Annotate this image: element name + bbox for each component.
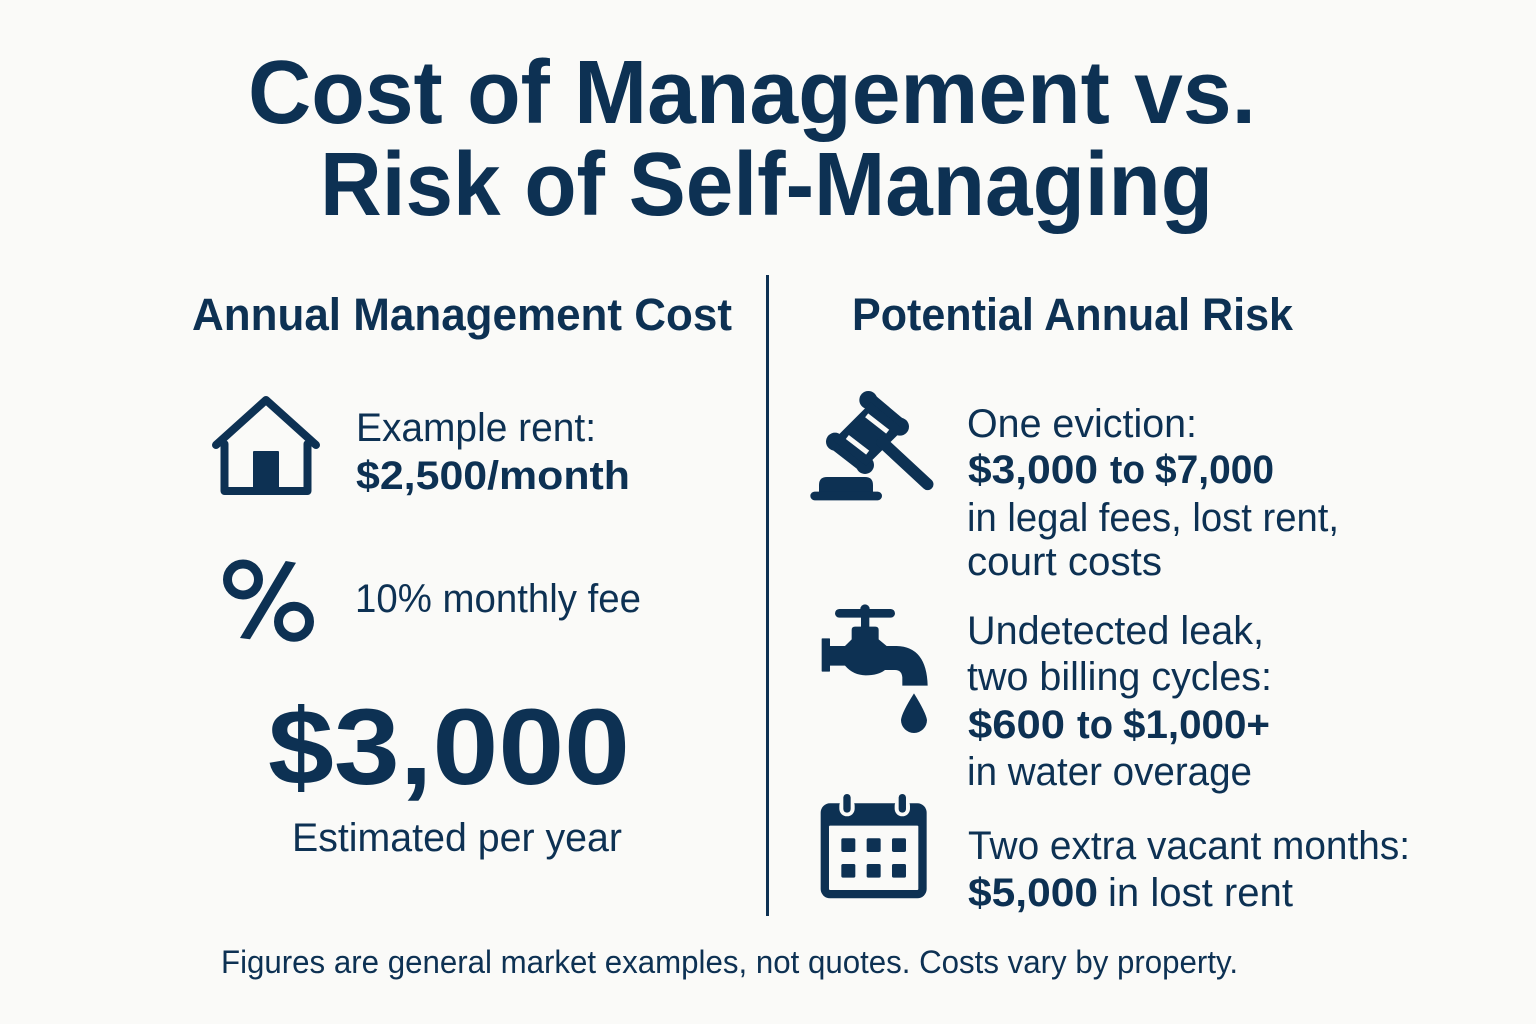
text: leak risk: Undetected leak, — [967, 609, 1264, 653]
text: vacancy risk: in lost rent — [1108, 871, 1293, 915]
text: eviction risk: One eviction: — [967, 402, 1197, 446]
text: example rent: $2,500/month — [356, 454, 630, 498]
text: eviction risk — [967, 402, 1339, 584]
title: Cost of Management vs. — [248, 43, 1256, 143]
text: vacancy risk — [968, 824, 1410, 915]
icon: calendar — [821, 794, 927, 898]
text: leak risk: to — [1077, 703, 1113, 747]
text: leak risk: $1,000+ — [1123, 703, 1270, 747]
footnote: Figures are general market examples, not quotes. Costs vary by property. — [221, 944, 1238, 980]
icon: dripping faucet — [822, 604, 928, 733]
big number: annual cost: $3,000 — [268, 686, 630, 807]
text: vacancy risk: Two extra vacant months: — [968, 824, 1410, 868]
text: eviction risk: $7,000 — [1155, 448, 1274, 492]
heading: potential annual risk: Potential Annual Risk — [852, 289, 1294, 340]
text: eviction risk: court costs — [967, 540, 1162, 584]
text: leak risk: $600 — [968, 703, 1065, 747]
text: eviction risk: to — [1110, 448, 1145, 492]
icon: percent — [228, 561, 310, 639]
text: eviction risk: $3,000 — [968, 448, 1098, 492]
text: vacancy risk: $5,000 — [968, 871, 1098, 915]
caption: estimated per year: Estimated per year — [292, 816, 622, 860]
text: eviction risk: in legal fees, lost rent, — [967, 496, 1339, 540]
icon: house — [216, 400, 316, 491]
text: example rent: Example rent: — [356, 406, 596, 450]
icon: gavel — [815, 391, 928, 496]
text: monthly fee: 10% monthly fee — [355, 577, 641, 621]
title — [248, 43, 1256, 235]
text: leak risk: two billing cycles: — [967, 655, 1272, 699]
heading: annual management cost: Annual Management Cost — [192, 289, 732, 340]
text: example rent — [356, 406, 630, 498]
text: leak risk: in water overage — [967, 750, 1252, 794]
title: Risk of Self-Managing — [320, 135, 1213, 235]
text: leak risk — [967, 609, 1272, 794]
